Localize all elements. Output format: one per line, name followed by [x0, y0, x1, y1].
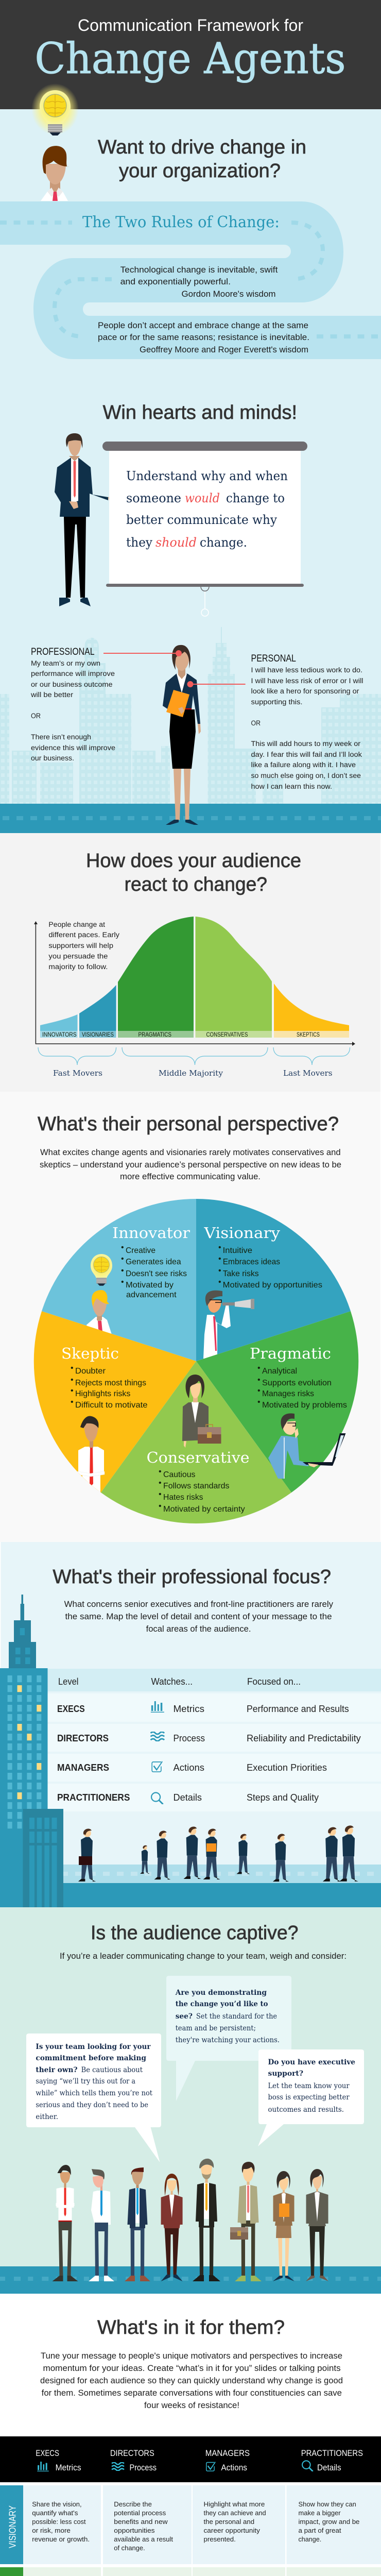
segment: visionary text: •: [218, 1255, 221, 1263]
segment: pragmatic text: Pragmatic: [250, 1345, 331, 1362]
callout: professional: There isn’t enough: [31, 733, 91, 741]
adoption bell curve chart: PRAGMATICS: [138, 1031, 171, 1038]
segment: innovator text: •: [121, 1243, 124, 1252]
row: visionary: they can achieve and: [204, 2509, 266, 2517]
segment: innovator text: [112, 1224, 190, 1299]
segment: conservative text: •: [159, 1502, 162, 1511]
speech bubble: executive support: support?: [268, 2070, 303, 2078]
icon: light bulb: [31, 83, 79, 135]
team member 7: [273, 2171, 295, 2281]
speech bubble: executive support: Let the team know your: [268, 2082, 350, 2090]
table header: Metrics: [56, 2463, 81, 2472]
segment: conservative text: •: [159, 1479, 162, 1487]
row: practitioners: [57, 1792, 319, 1804]
callout: personal: supporting this.: [251, 698, 303, 706]
table header: DIRECTORS: [110, 2448, 154, 2458]
segment: visionary text: •: [218, 1243, 221, 1252]
conservative figure: [182, 1375, 221, 1448]
row: visionary: of change.: [114, 2544, 145, 2552]
row: visionary: quantify what's: [32, 2509, 78, 2517]
commuter with briefcase: [78, 1828, 96, 1882]
visionary figure: [203, 1291, 254, 1359]
row: visionary: Highlight what more: [204, 2500, 265, 2508]
chart note: majority to follow.: [48, 963, 108, 971]
row: visionary: revenue or growth.: [32, 2535, 90, 2543]
screen message: they: [126, 535, 152, 550]
speech bubble: demonstrating: team and be persistent;: [176, 2024, 256, 2032]
segment: skeptic text: •: [71, 1364, 74, 1372]
callout: professional: our business.: [31, 754, 74, 762]
row: directors: Process: [173, 1733, 205, 1743]
table: focus by level: Focused on...: [247, 1676, 301, 1687]
panel: header: [0, 0, 381, 109]
rule two: Geoffrey Moore and Roger Everett's wisdom: [140, 345, 308, 354]
icon: innovator bulb: [91, 1254, 112, 1286]
heading: What's their professional focus?: [53, 1566, 331, 1588]
heading: want to drive change: Want to drive change in: [98, 137, 306, 158]
team member 6: [230, 2162, 262, 2281]
speech bubble: executive support: [258, 2049, 364, 2146]
intro paragraph: skeptics – understand your audience’s personal perspective on new ideas to be: [40, 1160, 341, 1170]
brace: middle majority: [122, 1047, 268, 1078]
segment: conservative text: Motivated by certainty: [163, 1505, 245, 1514]
segment: visionary text: Take risks: [223, 1269, 259, 1278]
screen message: Understand why and when: [126, 469, 288, 483]
row: managers: MANAGERS: [57, 1762, 109, 1773]
table: focus by level: Watches...: [151, 1676, 193, 1687]
office tower: [0, 1595, 63, 1907]
row: execs: Metrics: [173, 1704, 204, 1714]
chart note: different paces. Early: [48, 931, 119, 939]
segment: conservative text: Hates risks: [163, 1493, 203, 1502]
segment: conservative text: •: [159, 1467, 162, 1476]
row: visionary: Show how they can: [299, 2500, 356, 2508]
pie: innovator slice: [42, 1199, 196, 1361]
heading: react to change?: [125, 874, 267, 895]
row: visionary: Share the vision,: [32, 2500, 82, 2508]
callout: personal: OR: [251, 719, 261, 727]
adoption bell curve chart: INNOVATORS: [42, 1031, 77, 1038]
person with idea: [41, 146, 69, 201]
segment: skeptic text: •: [71, 1398, 74, 1406]
callout: personal: I will have less tedious work to do.: [251, 666, 362, 674]
segment: skeptic text: Rejects most things: [75, 1379, 146, 1387]
segment: conservative text: Cautious: [163, 1470, 195, 1479]
row: visionary: the personal and: [204, 2518, 254, 2526]
callout: professional: will be better: [30, 691, 74, 699]
segment: conservative text: Follows standards: [163, 1482, 230, 1490]
segment: skeptic text: [61, 1345, 148, 1410]
speech bubble: commitment: serious and they don’t need to be: [36, 2101, 148, 2109]
row: visionary: available as a result: [114, 2535, 173, 2543]
row: directors: DIRECTORS: [57, 1733, 109, 1743]
heading: want to drive change: your organization?: [119, 160, 281, 182]
heading: [86, 850, 301, 895]
speech bubble: commitment: [26, 2033, 161, 2162]
speech bubble: commitment: commitment before making: [36, 2054, 146, 2062]
brace: fast movers: [38, 1047, 116, 1078]
rule one: Technological change is inevitable, swift: [120, 265, 278, 275]
segment: visionary text: [203, 1224, 322, 1290]
intro paragraph: designed for each audience so they can quickly understand why change is good: [40, 2376, 343, 2385]
callout: personal: so much else going on, I don’t see: [251, 772, 361, 779]
pie: conservative slice: [101, 1361, 291, 1523]
intro paragraph: Tune your message to people's unique motivators and perspectives to increase: [41, 2351, 342, 2361]
intro paragraph: the same. Map the level of detail and content of your message to the: [65, 1612, 332, 1621]
heading: How does your audience: [86, 850, 301, 872]
city skyline: [0, 627, 381, 804]
callout: professional: My team’s or my own: [31, 659, 100, 667]
pie: visionary slice: [196, 1199, 351, 1361]
segment: visionary text: •: [218, 1278, 221, 1286]
speech bubble: demonstrating: see?: [176, 2012, 193, 2021]
segment: innovator text: •: [121, 1266, 124, 1275]
team member 1: [53, 2165, 78, 2281]
row: visionary: a part of great: [299, 2527, 341, 2534]
pie: skeptic slice: [34, 1311, 196, 1493]
rule two: [98, 321, 309, 354]
road with commuters: [0, 1825, 381, 1907]
segment: skeptic text: Difficult to motivate: [75, 1401, 148, 1410]
intro paragraph: [40, 1148, 341, 1181]
row: practitioners: Steps and Quality: [247, 1792, 319, 1803]
table header: EXECS: [36, 2448, 59, 2458]
intro paragraph: [40, 2351, 343, 2410]
callout: personal: PERSONAL: [251, 653, 296, 664]
screen message: change to: [226, 491, 285, 505]
segment: pragmatic text: •: [257, 1398, 261, 1406]
heading: What's in it for them?: [97, 2317, 285, 2338]
chart note: People change at: [48, 921, 105, 928]
speech bubble: executive support: outcomes and results.: [268, 2106, 344, 2114]
segment: pragmatic text: Motivated by problems: [262, 1401, 347, 1410]
adoption bell curve chart: VISIONARIES: [82, 1031, 114, 1038]
callout: personal: day. I fear this will fail and I’ll look: [251, 751, 362, 758]
intro paragraph: four weeks of resistance!: [144, 2401, 239, 2410]
commuter reading: [273, 1834, 289, 1882]
heading: the two rules: The Two Rules of Change:: [82, 213, 280, 231]
row: visionary: [0, 2485, 381, 2564]
commuters shaking hands: [184, 1826, 220, 1879]
speech bubble: demonstrating: [166, 1976, 291, 2101]
segment: skeptic text: •: [71, 1386, 74, 1395]
intro paragraph: [64, 1600, 334, 1634]
callout: professional: [30, 647, 182, 762]
segment: innovator text: Innovator: [112, 1224, 190, 1242]
table header: Details: [317, 2463, 341, 2472]
row: managers: [57, 1761, 327, 1773]
rule one: Gordon Moore's wisdom: [181, 290, 276, 299]
callout: personal: I will have less risk of error or I will: [251, 677, 363, 685]
intro paragraph: focal areas of the audience.: [146, 1624, 251, 1634]
segment: visionary text: Intuitive: [223, 1246, 252, 1255]
speech bubble: demonstrating: the change you’d like to: [176, 2000, 268, 2008]
row: visionary: make a bigger: [299, 2509, 341, 2517]
brace: fast movers: Fast Movers: [53, 1069, 102, 1078]
screen message: should: [155, 535, 197, 550]
segment: skeptic text: •: [71, 1376, 74, 1384]
row: managers: Execution Priorities: [247, 1762, 327, 1773]
row: managers: Actions: [173, 1762, 204, 1773]
table header: MANAGERS: [205, 2448, 250, 2458]
brace: middle majority: Middle Majority: [159, 1069, 223, 1078]
heading: win hearts and minds: Win hearts and minds!: [103, 402, 297, 423]
segment: skeptic text: Skeptic: [61, 1345, 119, 1362]
segment: pragmatic text: Analytical: [262, 1367, 297, 1376]
commuter on phone: [154, 1831, 170, 1879]
speech bubble: demonstrating: Set the standard for the: [196, 2012, 277, 2021]
segment: innovator text: Generates idea: [126, 1258, 181, 1266]
commuter small: [140, 1845, 150, 1874]
speech bubble: commitment: saying “we’ll try this out for a: [36, 2077, 135, 2086]
row: directors: [57, 1732, 361, 1743]
row: visionary: potential process: [114, 2509, 166, 2517]
segment: innovator text: Doesn't see risks: [126, 1269, 187, 1278]
intro paragraph: for them. Sometimes separate conversations with four constituencies can save: [42, 2388, 342, 2398]
row: execs: EXECS: [57, 1704, 85, 1714]
intro paragraph: What excites change agents and visionaries rarely motivates conservatives and: [40, 1148, 341, 1157]
team member 3: [125, 2167, 150, 2281]
segment: conservative text: •: [159, 1490, 162, 1499]
innovator figure: [86, 1290, 112, 1334]
commuter walking: [236, 1834, 250, 1874]
intro paragraph: momentum for your ideas. Create “what’s in it for you” slides or talking points: [43, 2364, 341, 2373]
brace: last movers: Last Movers: [283, 1069, 333, 1078]
segment: pragmatic text: •: [257, 1376, 261, 1384]
row: practitioners: PRACTITIONERS: [57, 1792, 130, 1803]
segment: pragmatic text: Supports evolution: [262, 1379, 332, 1387]
callout: professional: performance will improve: [31, 670, 115, 677]
segment: visionary text: •: [218, 1266, 221, 1275]
chart note: [48, 921, 119, 971]
callout: personal: This will add hours to my week or: [251, 740, 361, 748]
intro paragraph: more effective communicating value.: [120, 1172, 261, 1181]
pragmatic figure: [268, 1413, 346, 1479]
chart note: supporters will help: [48, 942, 113, 950]
heading: want to drive change: [98, 137, 306, 182]
chart note: you persuade the: [48, 952, 108, 960]
screen message: better communicate why: [126, 513, 277, 527]
heading: What's their personal perspective?: [38, 1113, 339, 1135]
callout: professional: or our business outcome: [31, 681, 112, 688]
segment: innovator text: Motivated by: [126, 1281, 174, 1290]
row: visionary: impact, grow and be: [299, 2518, 359, 2526]
row: execs: Performance and Results: [247, 1704, 349, 1714]
table header: [0, 2436, 381, 2482]
screen message: someone: [126, 491, 181, 505]
segment: pragmatic text: [250, 1345, 347, 1410]
panel: personal perspective: [34, 1116, 358, 1523]
segment: innovator text: advancement: [126, 1291, 177, 1299]
team member 8: [306, 2169, 328, 2281]
speech bubble: commitment: either.: [36, 2113, 58, 2121]
row: visionary: benefits and new: [114, 2518, 168, 2526]
callout: professional: OR: [31, 712, 41, 720]
pie: pragmatic slice: [196, 1311, 358, 1493]
brace: last movers: [273, 1047, 350, 1078]
segment: conservative text: Conservative: [147, 1449, 250, 1466]
intro sentence: If you’re a leader communicating change to your team, weigh and consider:: [60, 1951, 347, 1961]
row: directors: Reliability and Predictability: [247, 1733, 361, 1743]
rule one: [120, 265, 278, 299]
ground strip: [0, 804, 381, 833]
rule two: pace or for the same reasons; resistance is inevitable.: [98, 333, 309, 342]
presenter figure: [55, 433, 121, 606]
segment: visionary text: Motivated by opportunities: [223, 1281, 322, 1290]
segment: pragmatic text: •: [257, 1386, 261, 1395]
row: execs: [57, 1701, 349, 1714]
projection screen: [102, 442, 307, 616]
team member 2: [89, 2169, 114, 2281]
segment: visionary text: Embraces ideas: [223, 1258, 280, 1266]
row: visionary: or risk, more: [32, 2527, 71, 2534]
row: visionary: Describe the: [114, 2500, 152, 2508]
speech bubble: commitment: while” which tells them you’re not: [36, 2089, 153, 2097]
row: visionary: opportunities: [114, 2527, 155, 2534]
intro paragraph: What concerns senior executives and front-line practitioners are rarely: [64, 1600, 334, 1609]
skeptic figure: [77, 1416, 105, 1493]
segment: conservative text: [147, 1449, 250, 1514]
callout: professional: PROFESSIONAL: [31, 647, 95, 657]
speech bubble: executive support: Do you have executive: [268, 2058, 355, 2066]
heading: Is the audience captive?: [91, 1922, 299, 1944]
adoption bell curve chart: [34, 917, 355, 1046]
segment: innovator text: Creative: [126, 1246, 155, 1255]
table header: Process: [130, 2463, 157, 2472]
callout: personal: like a failure along with it. I have: [251, 761, 356, 769]
row: visionary: career opportunity: [204, 2527, 260, 2534]
rule two: People don’t accept and embrace change at the same: [98, 321, 308, 330]
adoption bell curve chart: CONSERVATIVES: [206, 1031, 248, 1038]
table: focus by level: [47, 1669, 381, 1811]
title: Change Agents: [35, 35, 346, 83]
callout: professional: evidence this will improve: [31, 744, 115, 752]
rule one: and exponentially powerful.: [120, 277, 231, 286]
segment: pragmatic text: Manages risks: [262, 1389, 314, 1398]
panel: what's in it for them: [0, 2294, 381, 2576]
row: pragmatic: [0, 2567, 381, 2576]
subtitle: Communication Framework for: [78, 16, 303, 35]
commuters discussing: [323, 1825, 358, 1882]
screen message: [126, 469, 288, 550]
panel: professional focus: [0, 1542, 381, 1907]
businesswoman figure: [163, 645, 201, 825]
callout: personal: look like a hero for sponsoring or: [251, 687, 359, 695]
road: two rules of change: [0, 201, 381, 359]
row: practitioners: Details: [173, 1792, 202, 1803]
row: visionary: possible: less cost: [32, 2518, 86, 2526]
panel: intro and two rules: [0, 83, 381, 833]
speech bubble: commitment: Be cautious about: [81, 2066, 143, 2074]
table header: Actions: [221, 2463, 247, 2472]
panel: is the audience captive: [0, 1907, 381, 2294]
speech bubble: demonstrating: Are you demonstrating: [175, 1989, 267, 1997]
segment: skeptic text: Highlights risks: [75, 1389, 130, 1398]
segment: innovator text: •: [121, 1278, 124, 1286]
screen message: change.: [200, 535, 247, 550]
callout: personal: [187, 653, 363, 790]
adoption bell curve chart: SKEPTICS: [297, 1031, 320, 1038]
table header: PRACTITIONERS: [301, 2448, 363, 2458]
row: visionary: VISIONARY: [8, 2505, 18, 2548]
segment: visionary text: Visionary: [203, 1224, 281, 1242]
speech bubble: commitment: Is your team looking for your: [36, 2043, 151, 2051]
team member 5: [193, 2159, 220, 2281]
speech bubble: demonstrating: they're watching your actions.: [176, 2036, 280, 2044]
team member 4: [161, 2174, 183, 2281]
speech bubble: commitment: their own?: [36, 2066, 77, 2074]
speech bubble: executive support: boss is expecting better: [268, 2093, 350, 2102]
table: focus by level: Level: [58, 1676, 78, 1687]
callout: personal: how I can learn this now.: [251, 783, 332, 790]
screen message: would: [185, 491, 220, 505]
segment: skeptic text: Doubter: [75, 1367, 106, 1376]
segment: pragmatic text: •: [257, 1364, 261, 1372]
row: visionary: presented.: [204, 2535, 236, 2543]
segment: innovator text: •: [121, 1255, 124, 1263]
panel: how does your audience react: [0, 833, 380, 1092]
row: visionary: change.: [299, 2535, 321, 2543]
